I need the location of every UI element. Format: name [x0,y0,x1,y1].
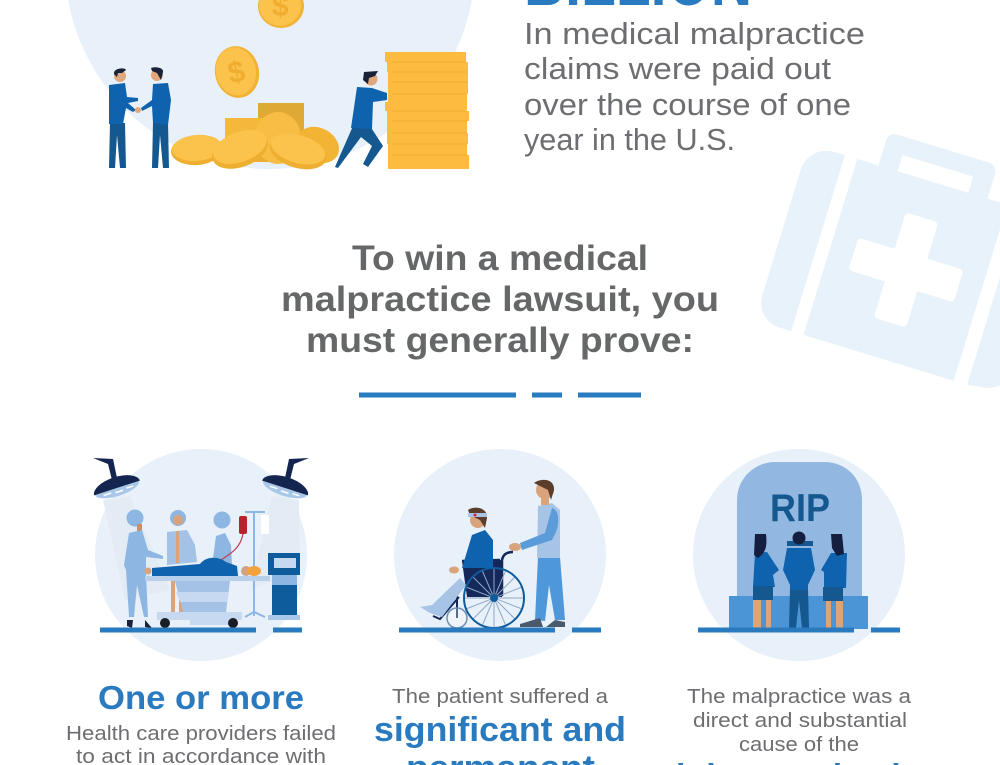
iv stand and bags [218,511,269,617]
doctor middle [167,510,197,612]
wheelchair [433,552,524,628]
doctor left [124,510,163,628]
mourner right [821,534,847,628]
stat description: year in the U.S. [524,122,735,157]
standing caregiver [509,480,565,627]
column 2 text [374,686,626,765]
operating table [145,576,270,628]
column 3 text: The malpractice was a [687,686,912,708]
stat description: over the course of one [524,87,851,122]
floor line [100,628,302,632]
coin stack [385,52,469,169]
falling coin top [258,0,304,28]
icon: medical bag watermark [755,111,1000,396]
floor line [399,628,601,632]
illustration: mourners at tombstone [693,449,905,661]
column 1 text [66,679,336,765]
illustration: operating room [91,449,311,661]
mourner left [753,534,779,628]
light beams [103,496,300,600]
patient on table [144,558,261,576]
section heading [281,239,719,360]
businessman left [109,68,138,168]
section heading: must generally prove: [306,321,694,360]
tombstone [737,462,862,600]
monitor [268,553,300,620]
surgical lamp right [260,458,311,503]
illustration: patient in wheelchair [394,449,606,661]
backdrop circle [693,449,905,661]
coin pile [170,103,345,176]
section heading: To win a medical [352,239,648,278]
tombstone base [729,596,868,629]
column 3 text: cause of the [739,734,859,756]
surgical lamp left [91,458,142,503]
businessman right [135,67,171,168]
doctor right [212,512,232,566]
falling coin middle: $ [225,55,248,90]
cross bar [787,541,813,546]
stat description: In medical malpractice [524,16,865,51]
column 2 text: The patient suffered a [392,686,609,708]
seated patient [420,508,493,617]
mourner middle [783,532,815,628]
column 2 text: significant and [374,711,626,749]
column 1 text: One or more [98,679,304,716]
illustration: money and businessmen [65,0,475,176]
background circle [65,0,475,169]
column 3 text: direct and substantial [693,710,907,732]
section heading: malpractice lawsuit, you [281,280,719,319]
floor line [698,628,900,632]
column 3 text [676,686,912,765]
rip text: RIP [770,487,830,530]
backdrop circle [95,449,307,661]
backdrop circle [394,449,606,661]
stat description [524,16,865,157]
heading divider [359,392,641,398]
businessman pushing [335,71,387,168]
stat description: claims were paid out [524,51,831,86]
falling coin middle [210,42,264,102]
column 1 text: Health care providers failed [66,723,336,745]
